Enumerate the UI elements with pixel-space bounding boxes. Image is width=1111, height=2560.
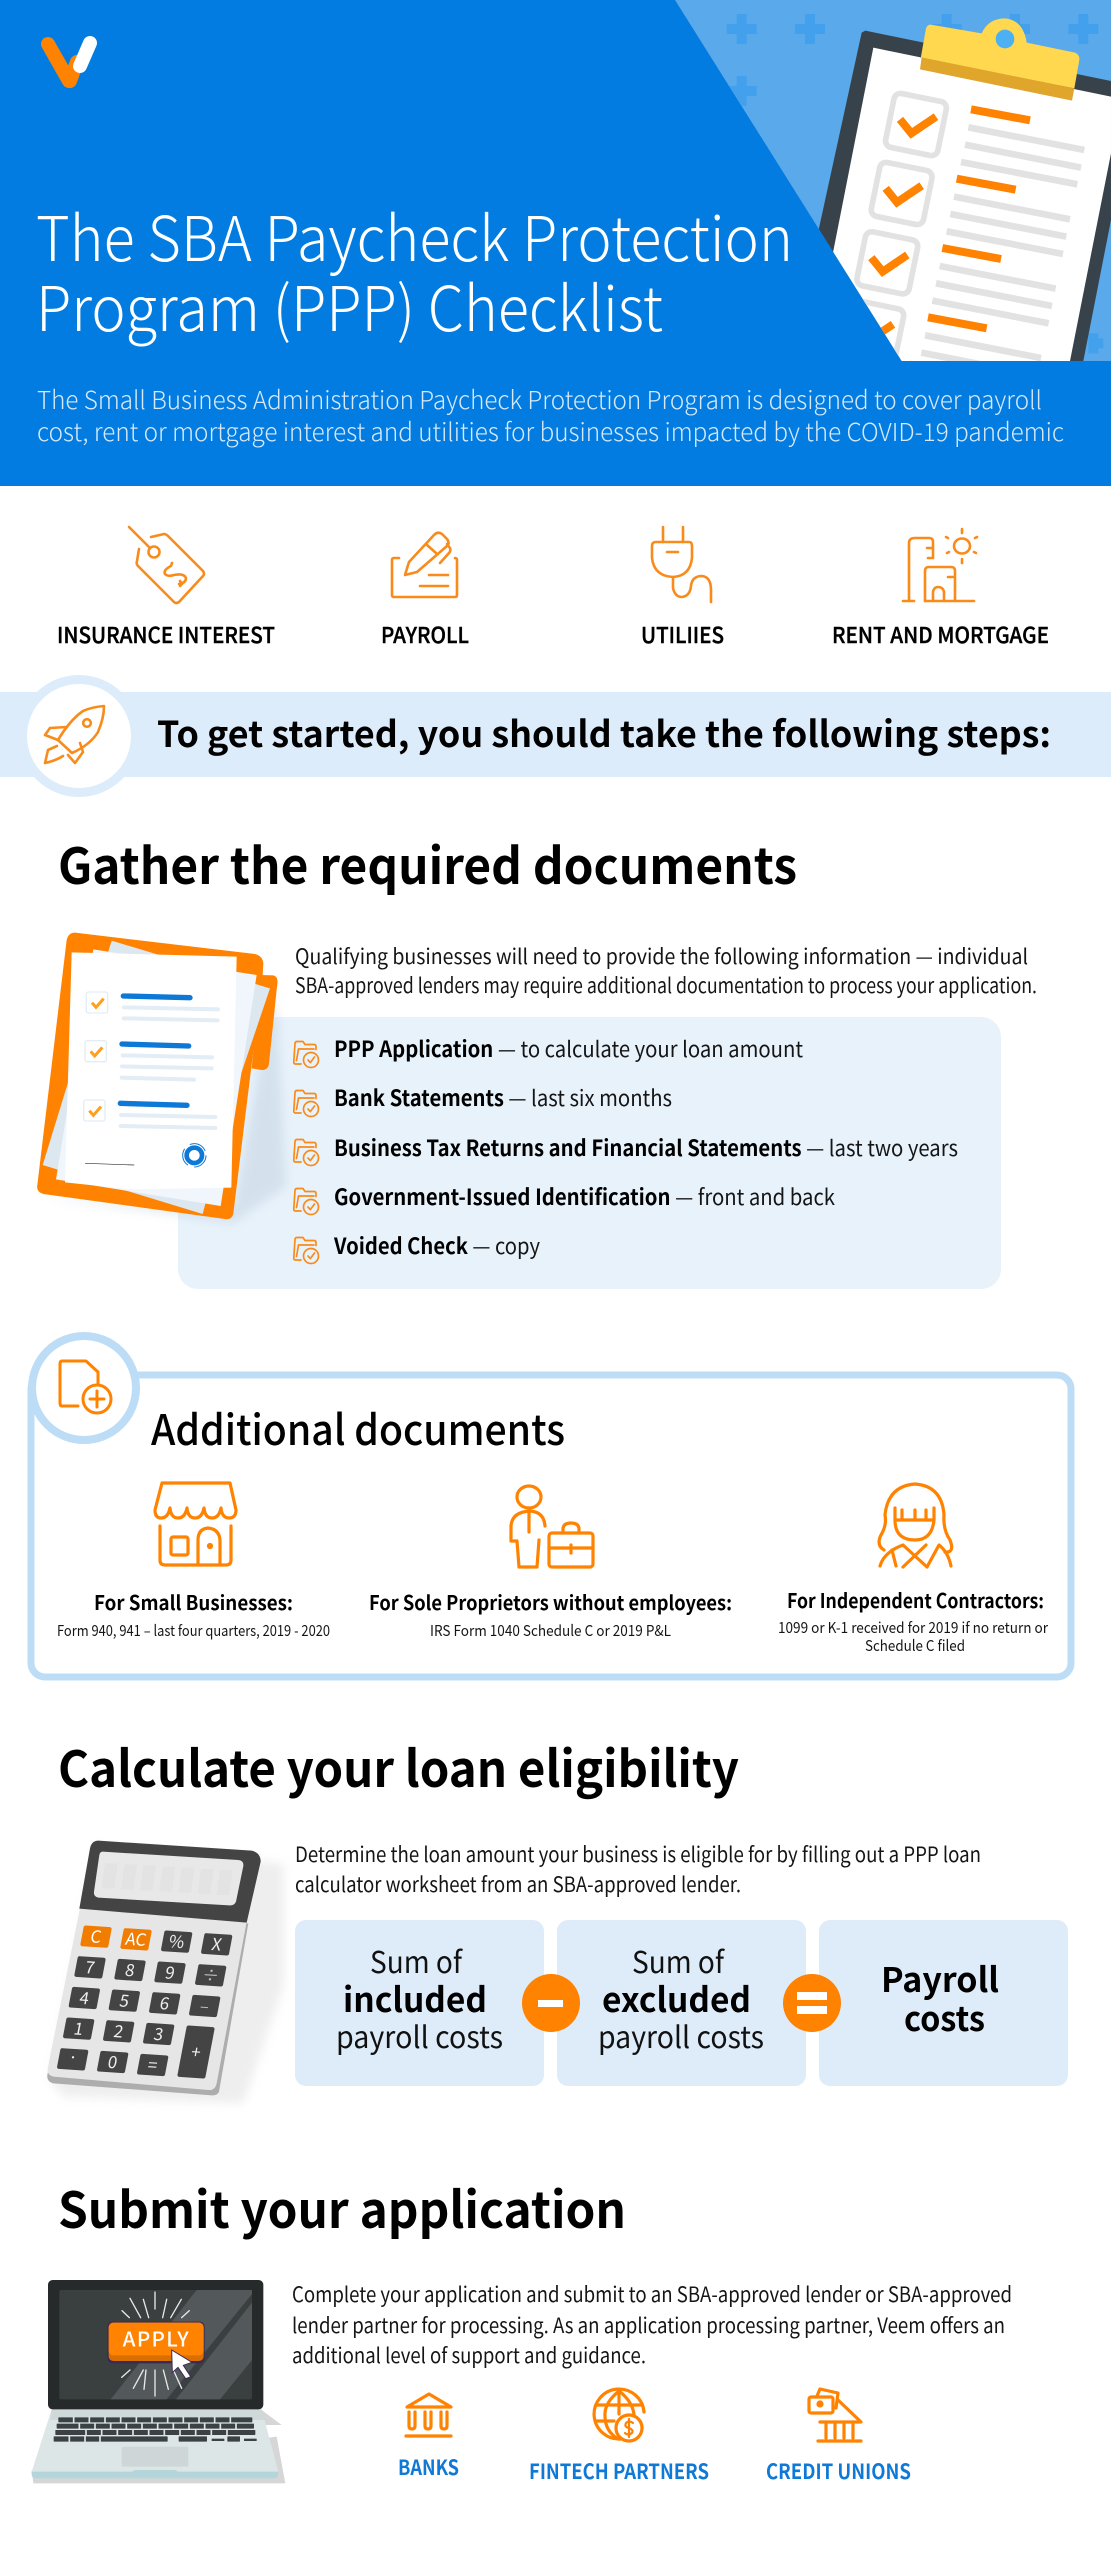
keyboard — [54, 2417, 257, 2442]
calculator keys: 3 — [152, 2020, 166, 2045]
column: sole proprietors — [369, 1587, 732, 1641]
heading: gather the required documents: Gather the required documents — [58, 827, 797, 899]
column: independent contractors: Schedule C filed — [865, 1635, 965, 1656]
heading: additional documents: Additional documents — [151, 1397, 565, 1458]
label: payroll: PAYROLL — [381, 618, 469, 650]
box: payroll costs result — [819, 1920, 1068, 2086]
title — [36, 189, 793, 349]
text: complete your application — [292, 2279, 1012, 2370]
icon: pen and cheque — [392, 533, 457, 597]
text: determine the loan amount: calculator worksheet from an SBA-approved lender. — [295, 1869, 741, 1899]
item: identification: Government-Issued Identification — front and back — [334, 1180, 835, 1212]
illustration: folder with documents — [37, 933, 287, 1223]
calculator keys: 2 — [112, 2017, 126, 2043]
icon: house and sun — [903, 529, 977, 601]
column: sole proprietors: IRS Form 1040 Schedule C or 2019 P&L — [430, 1620, 671, 1641]
icon: document plus in circle — [32, 1336, 136, 1440]
box: excluded payroll costs: Sum of — [632, 1938, 725, 1982]
icon: rocket in circle — [22, 680, 136, 792]
heading: submit your application: Submit your application — [58, 2171, 626, 2243]
panel: required documents list background — [178, 1017, 1001, 1289]
calculator keys: = — [146, 2051, 160, 2076]
calculator keys: C — [89, 1923, 104, 1948]
text: complete your application: lender partner for processing. As an application processing partner, Veem offers an — [292, 2310, 1005, 2340]
logo: Veem V — [48, 43, 90, 81]
heading: calculate your loan eligibility: Calculate your loan eligibility — [58, 1730, 739, 1802]
column: independent contractors: 1099 or K-1 received for 2019 if no return or — [778, 1617, 1048, 1638]
calculator keys: 0 — [106, 2048, 120, 2073]
text: qualifying businesses — [295, 941, 1037, 1000]
icon: equals — [783, 1974, 841, 2032]
label: banks: BANKS — [398, 2452, 459, 2482]
calculator keys: 9 — [163, 1959, 177, 1984]
column: small businesses — [57, 1587, 330, 1641]
calculator keys: ÷ — [200, 1961, 222, 1987]
icon: shop — [155, 1483, 236, 1565]
panel: lender types — [398, 2389, 911, 2486]
text: qualifying businesses: Qualifying businesses will need to provide the following information — individual — [295, 941, 1028, 971]
icon: bank — [406, 2394, 451, 2436]
icon: independent contractor — [879, 1484, 952, 1567]
box: included payroll costs: Sum of — [370, 1938, 463, 1982]
panel: payroll formula — [295, 1920, 1068, 2086]
box: excluded payroll costs: payroll costs — [598, 2013, 764, 2057]
title: Program (PPP) Checklist — [36, 259, 663, 349]
illustration: laptop — [32, 2280, 285, 2483]
calculator keys: X — [210, 1930, 224, 1956]
icon: minus — [522, 1974, 580, 2032]
label: fintech partners: FINTECH PARTNERS — [529, 2456, 709, 2486]
label: credit unions: CREDIT UNIONS — [766, 2456, 911, 2486]
calculator keys: 1 — [72, 2015, 86, 2040]
text: determine the loan amount — [295, 1839, 981, 1899]
column: small businesses: Form 940, 941 – last four quarters, 2019 - 2020 — [57, 1620, 330, 1641]
column: independent contractors — [778, 1585, 1048, 1656]
item: ppp application: PPP Application — to calculate your loan amount — [334, 1032, 803, 1064]
calculator keys: – — [198, 1992, 212, 2017]
icon: credit union — [809, 2389, 861, 2441]
list: required documents — [294, 1032, 958, 1264]
illustration: clipboard checklist — [675, 0, 1111, 375]
box: payroll costs result: Payroll — [881, 1953, 999, 2002]
calculator keys: 8 — [123, 1956, 137, 1981]
banner: get started — [0, 680, 1111, 792]
calculator keys: 4 — [78, 1984, 92, 2009]
icon: sole proprietor — [511, 1486, 593, 1567]
illustration: laptop: APPLY — [123, 2323, 189, 2353]
text: complete your application: additional level of support and guidance. — [292, 2340, 646, 2370]
box: payroll costs result: costs — [904, 1992, 985, 2041]
box: included payroll costs: included — [343, 1973, 487, 2022]
intro text: The Small Business Administration Paycheck Protection Program is designed to cover payroll — [37, 381, 1042, 417]
item: tax returns: Business Tax Returns and Financial Statements — last two years — [334, 1131, 958, 1163]
panel: covered costs icons — [57, 527, 1049, 650]
intro text — [37, 381, 1064, 449]
intro text: cost, rent or mortgage interest and utilities for businesses impacted by the COVID-19 pandemic — [37, 413, 1064, 449]
clip of the clipboard — [920, 18, 1079, 101]
column: small businesses: For Small Businesses: — [94, 1587, 293, 1616]
calculator keys: AC — [124, 1925, 149, 1951]
banner heading: To get started, you should take the following steps: — [157, 706, 1051, 758]
panel: additional documents — [31, 1336, 1071, 1677]
text: complete your application: Complete your application and submit to an SBA-approved lender or SBA-approved — [292, 2279, 1012, 2309]
icon: globe with dollar — [594, 2389, 644, 2441]
box: included payroll costs: payroll costs — [336, 2013, 503, 2057]
icon: plug — [652, 527, 711, 602]
column: independent contractors: For Independent Contractors: — [787, 1585, 1044, 1614]
item: voided check: Voided Check — copy — [333, 1229, 540, 1261]
calculator keys: 5 — [118, 1987, 132, 2012]
item: bank statements: Bank Statements — last six months — [334, 1081, 672, 1113]
text: determine the loan amount: Determine the loan amount your business is eligible for by filling out a PPP loan — [295, 1839, 981, 1869]
column: sole proprietors: For Sole Proprietors without employees: — [369, 1587, 732, 1616]
calculator keys: % — [167, 1927, 187, 1953]
panel: hero header — [0, 0, 1111, 486]
box: excluded payroll costs: excluded — [602, 1973, 751, 2022]
label: insurance interest: INSURANCE INTEREST — [57, 618, 275, 650]
icon: price tag — [129, 527, 204, 603]
box: excluded payroll costs — [557, 1920, 806, 2086]
label: utilities: UTILIIES — [641, 618, 724, 650]
box: included payroll costs — [295, 1920, 544, 2086]
calculator keys: · — [66, 2043, 80, 2069]
calculator keys — [57, 1922, 233, 2079]
calculator keys: 6 — [158, 1989, 172, 2015]
calculator keys: + — [189, 2038, 203, 2063]
label: rent and mortgage: RENT AND MORTGAGE — [832, 618, 1049, 650]
title: The SBA Paycheck Protection — [36, 189, 793, 279]
illustration: calculator — [47, 1841, 283, 2103]
calculator keys: 7 — [83, 1953, 97, 1979]
